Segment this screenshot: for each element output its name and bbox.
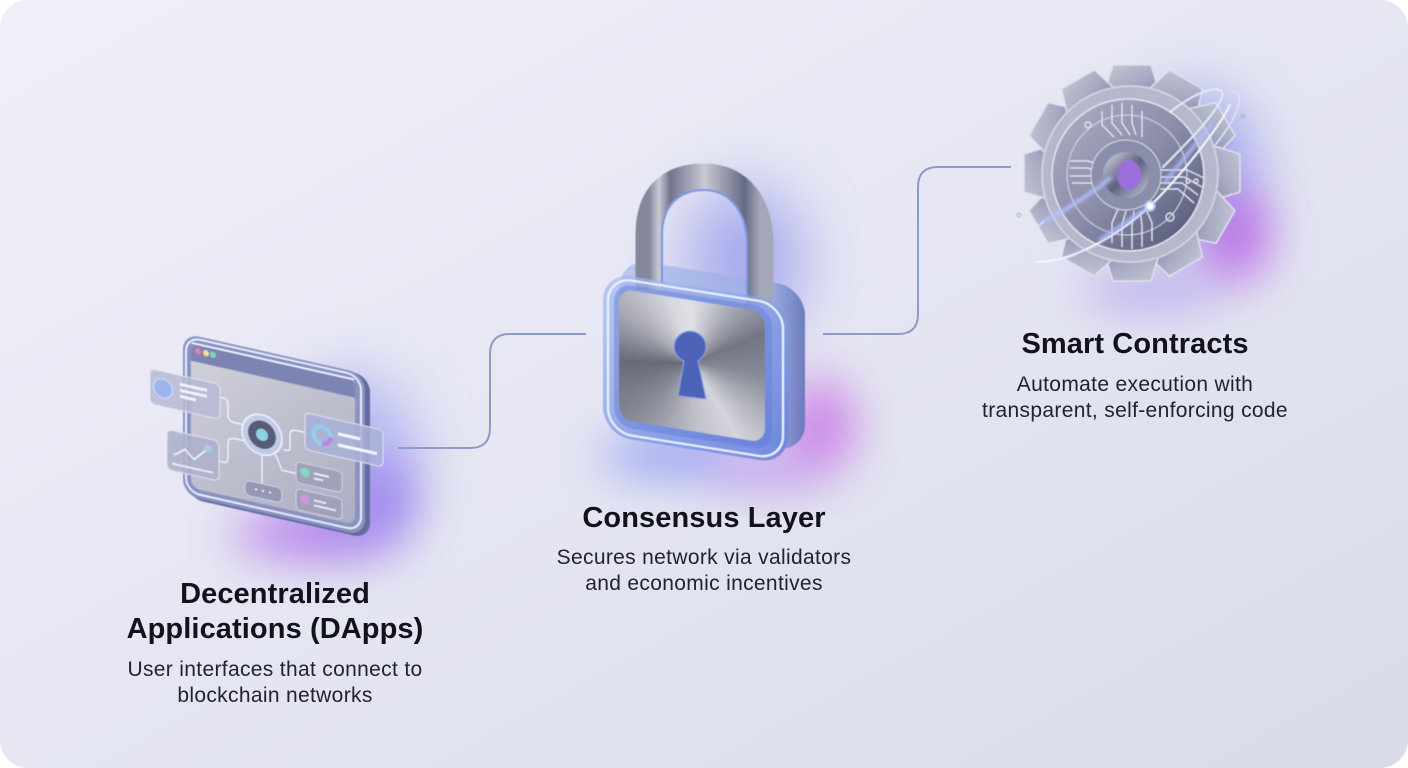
card: dots: [245, 480, 282, 503]
connector traces: [219, 397, 305, 493]
circuit traces: [1070, 103, 1204, 249]
connector: DApps to Consensus: [398, 334, 586, 448]
lock rear glass: [620, 258, 805, 453]
glow: gear: [1080, 95, 1269, 304]
keyhole: [674, 331, 706, 399]
description second line: transparent, self-enforcing code: [982, 399, 1288, 422]
gear hub: [1091, 140, 1161, 210]
floating particles: [1017, 114, 1245, 217]
heading: Decentralized: [180, 578, 370, 610]
brushed metal plate: [619, 289, 765, 443]
heading second line: Applications (DApps): [127, 613, 423, 645]
description: Secures network via validators: [557, 546, 851, 569]
card: pink item: [296, 488, 342, 520]
connector: Consensus to Smart Contracts: [823, 167, 1011, 334]
description second line: and economic incentives: [585, 572, 823, 595]
lock shackle: [649, 177, 760, 305]
card: donut status: [305, 412, 383, 467]
card: chart: [167, 429, 219, 481]
bright spark: [1146, 202, 1154, 210]
orbit rings: [1026, 89, 1239, 265]
card: green item: [296, 461, 342, 493]
card: profile: [150, 369, 220, 419]
description: User interfaces that connect to: [127, 658, 423, 681]
label: Decentralized Applications: [127, 578, 423, 707]
heading: Consensus Layer: [582, 502, 826, 534]
icon: gear with circuit: [1017, 65, 1245, 281]
icon: DApp browser window: [150, 326, 383, 542]
icon: padlock: [603, 177, 805, 465]
gear teeth: [1024, 65, 1240, 281]
glow: DApps: [230, 375, 415, 557]
gear body: [1042, 86, 1218, 262]
description: Automate execution with: [1017, 373, 1253, 396]
label: Smart Contracts: [982, 328, 1288, 422]
heading: Smart Contracts: [1021, 328, 1249, 360]
window dots: [195, 348, 216, 358]
glow: lock: [600, 185, 854, 484]
hub node: [241, 409, 283, 460]
lock front glass: [603, 272, 788, 465]
label: Consensus Layer: [557, 502, 851, 595]
description second line: blockchain networks: [177, 684, 373, 707]
